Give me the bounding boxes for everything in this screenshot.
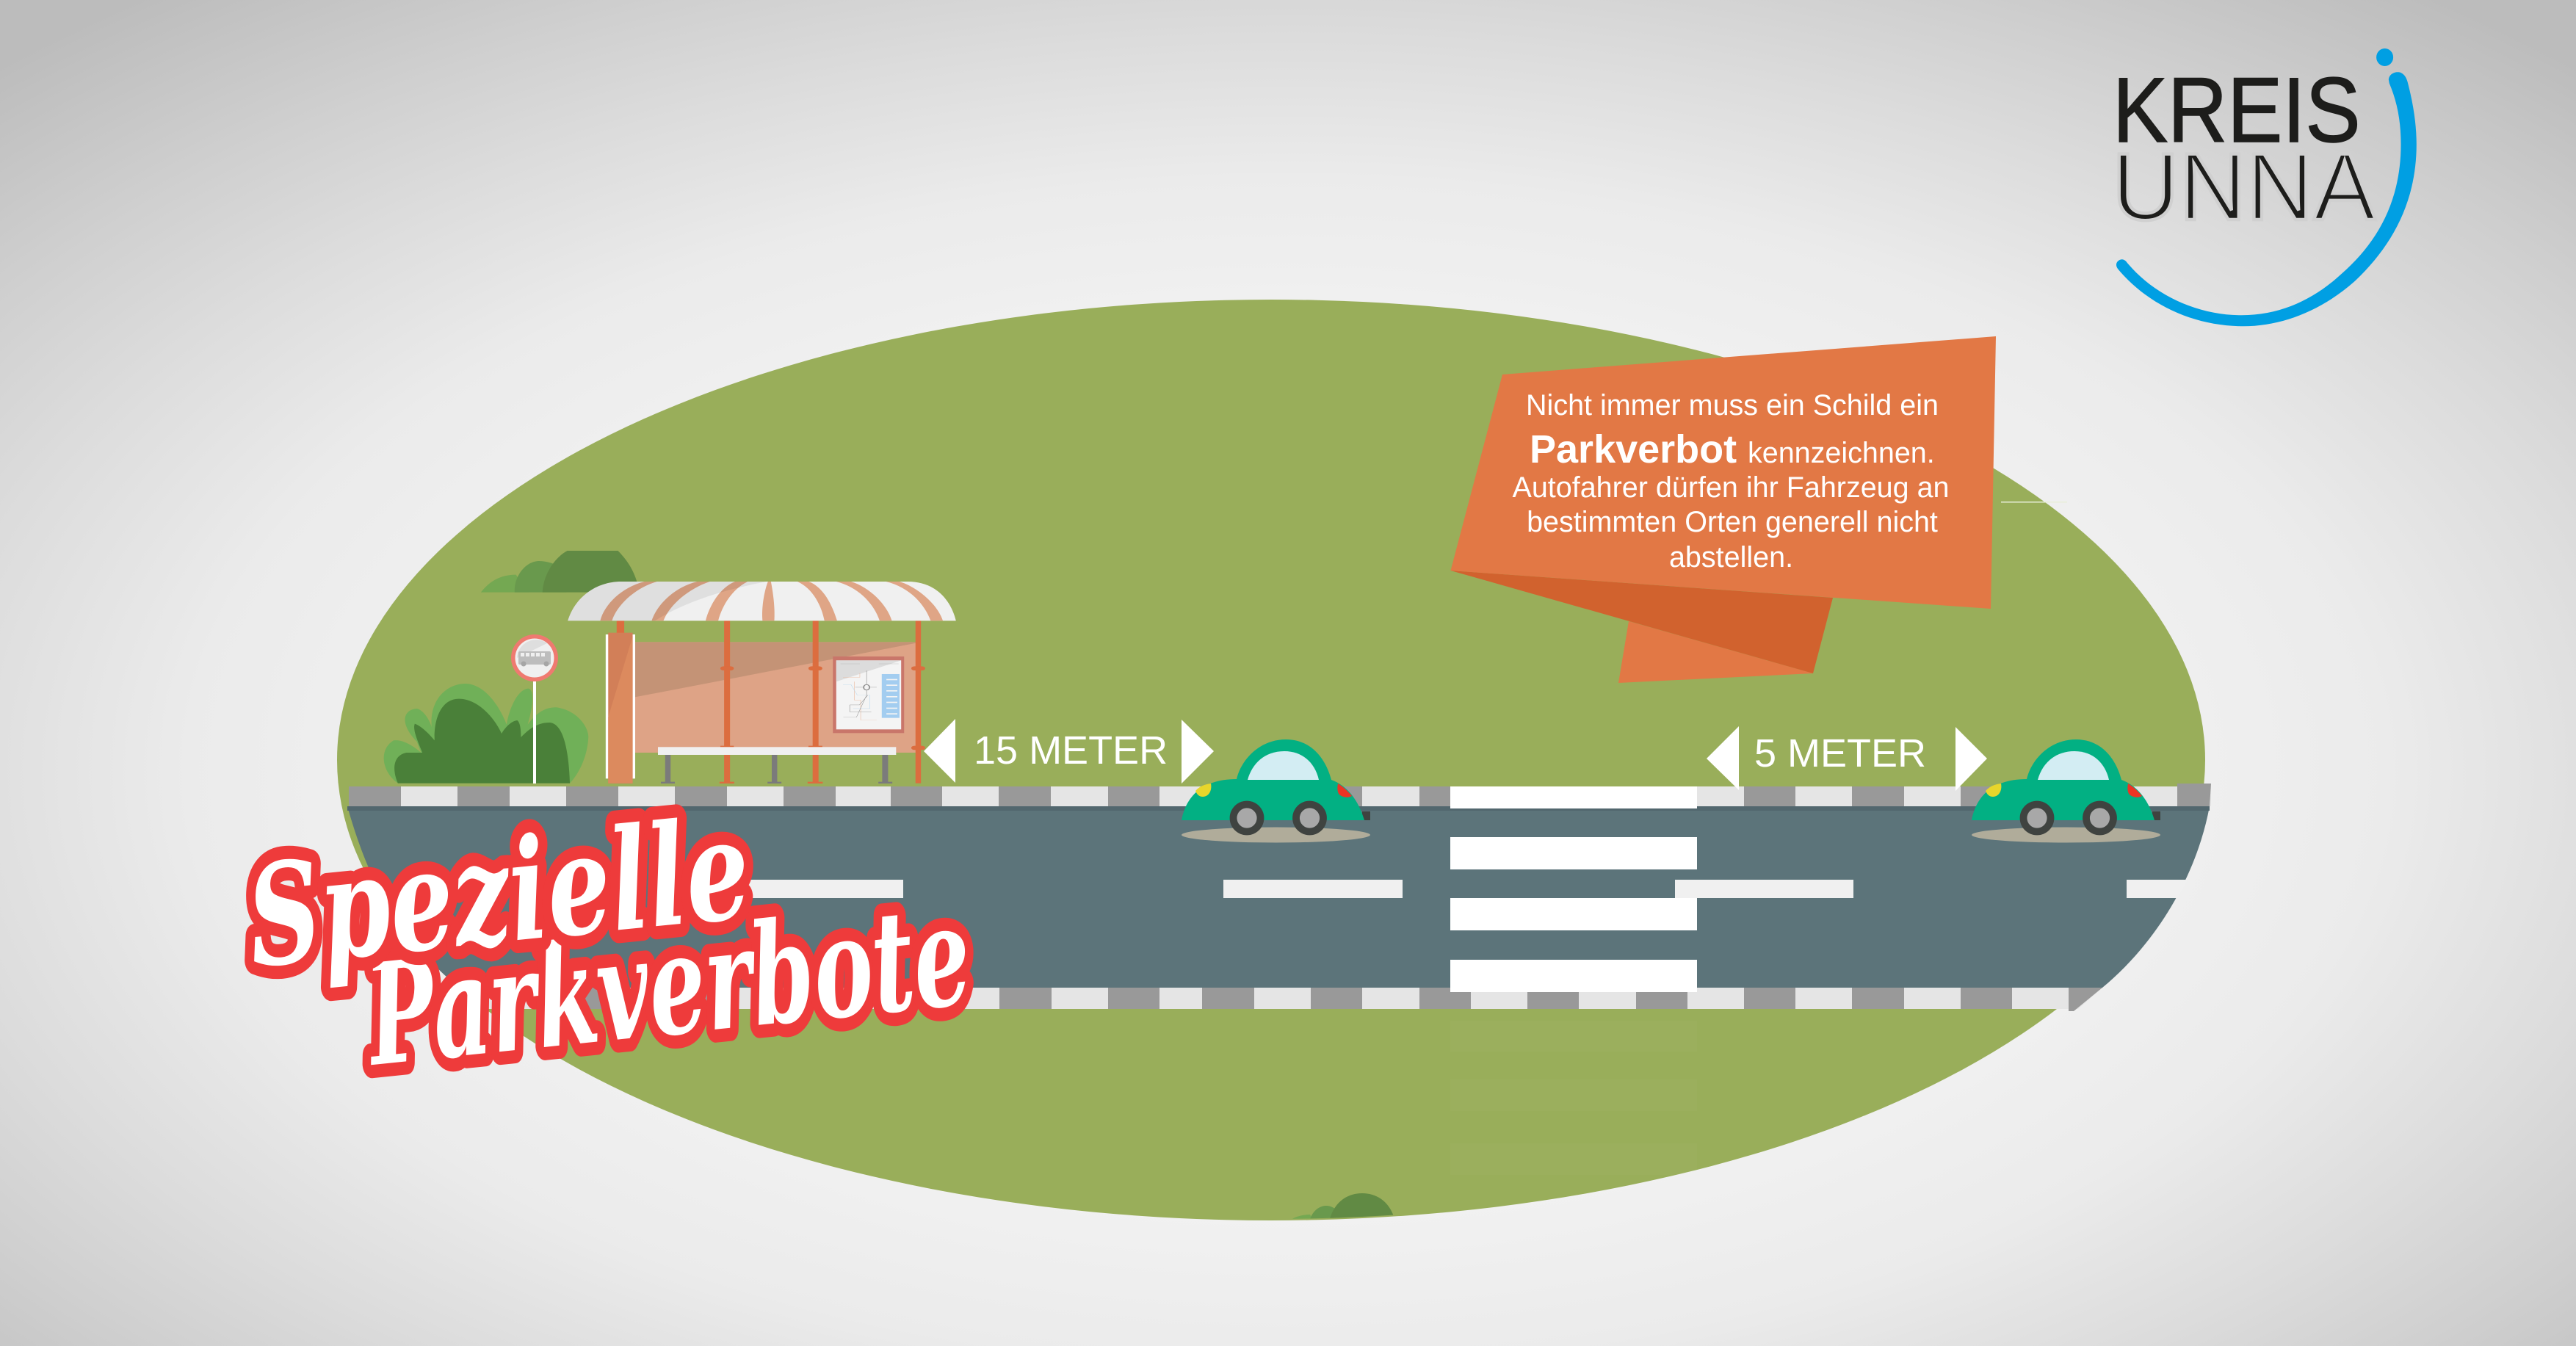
callout banner	[1451, 336, 1996, 683]
glass shadow	[635, 642, 916, 697]
support posts	[617, 620, 925, 784]
logo swoosh	[2116, 72, 2417, 326]
large end post	[606, 633, 635, 784]
title line 2: Parkverbote	[358, 872, 977, 1098]
icon: bush at the bottom of the oval	[1292, 1193, 1394, 1219]
bench	[658, 747, 896, 784]
road surface	[347, 806, 2210, 988]
green oval landscape	[337, 300, 2205, 1220]
banner tail	[1618, 621, 1813, 683]
banner text: kennzeichnen.	[1748, 437, 1935, 469]
zebra crossing	[1450, 786, 1697, 992]
top curb	[349, 784, 2211, 806]
banner fold	[1451, 571, 1833, 673]
icon: bus stop sign	[511, 634, 558, 784]
car at 15 meter distance	[1182, 739, 1370, 843]
title	[240, 786, 977, 1098]
distance marker: 15 meter: 15 METER	[974, 728, 1168, 772]
banner text	[1512, 389, 1950, 574]
car shadow	[1972, 827, 2160, 843]
centre lane dashes	[724, 880, 2188, 898]
title line 1: Spezielle	[240, 786, 756, 999]
faint crosswalk reflection on grass	[1450, 1021, 1697, 1175]
banner text: Autofahrer dürfen ihr Fahrzeug an	[1512, 471, 1950, 504]
banner text: bestimmten Orten generell nicht	[1527, 506, 1938, 538]
logo: Kreis Unna	[2112, 48, 2417, 326]
car at 5 meter distance	[1972, 739, 2160, 843]
logo dot	[2376, 48, 2393, 66]
car shadow	[1182, 827, 1370, 843]
banner text: Nicht immer muss ein Schild ein	[1526, 389, 1939, 421]
banner text: abstellen.	[1669, 541, 1793, 574]
glass panel	[635, 642, 916, 753]
distance marker: 15 meter	[924, 719, 1214, 784]
timetable poster	[833, 656, 904, 733]
striped roof	[568, 582, 956, 620]
banner text: Parkverbot	[1530, 427, 1737, 471]
bottom curb	[457, 988, 2102, 1011]
icon: distant bush behind shelter	[481, 551, 640, 593]
icon: bushes beside the bus stop	[384, 684, 588, 784]
distance marker: 5 meter	[1707, 726, 1987, 791]
icon: bus shelter	[568, 582, 956, 784]
distance marker: 5 meter: 5 METER	[1754, 731, 1926, 775]
logo word KREIS: KREIS	[2113, 59, 2361, 162]
banner front	[1451, 336, 1996, 609]
logo word UNNA: UNNA	[2112, 134, 2376, 240]
